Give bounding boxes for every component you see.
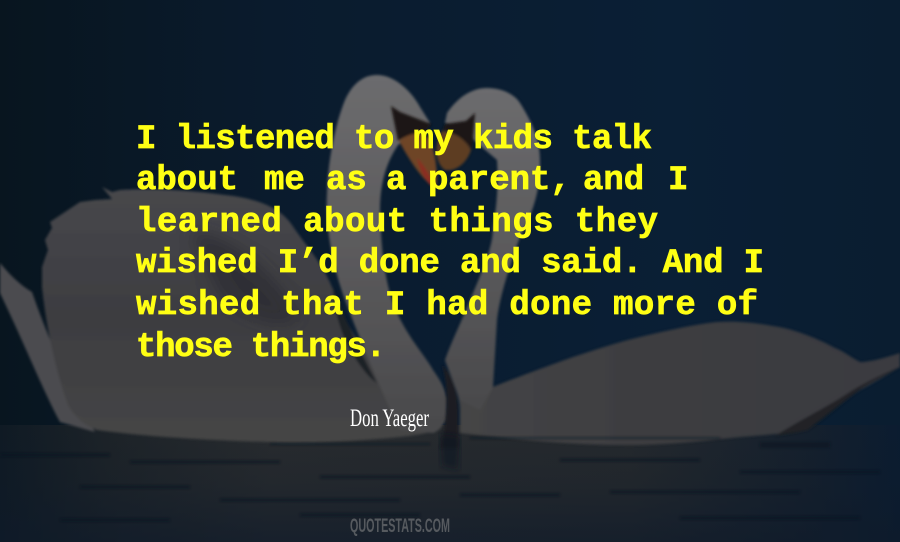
right swan xyxy=(440,88,900,448)
line 2: me xyxy=(264,162,305,200)
line 2: and xyxy=(583,162,644,200)
left swan xyxy=(0,75,447,443)
shadow between swans xyxy=(440,365,458,448)
line 2: I xyxy=(668,162,688,200)
right swan orange beak xyxy=(436,131,471,170)
author name: Don Yaeger xyxy=(350,405,429,432)
line 1: I listened to my kids talk xyxy=(136,121,652,159)
left swan red beak tip xyxy=(417,158,436,188)
right swan body xyxy=(445,322,900,445)
right swan neck xyxy=(445,88,540,410)
line 2: about xyxy=(136,162,238,200)
neck reflection xyxy=(440,434,460,470)
left swan orange beak xyxy=(399,133,437,188)
swan faces xyxy=(391,106,475,188)
water depth shading xyxy=(0,425,900,542)
line 4: wished I’d done and said. And I xyxy=(136,245,764,283)
water surface xyxy=(0,425,900,542)
water xyxy=(0,425,900,542)
line 2: a xyxy=(386,162,406,200)
quote text xyxy=(136,121,764,367)
left swan wing and body xyxy=(42,187,447,443)
left swan neck xyxy=(327,75,447,433)
line 2: as xyxy=(326,162,367,200)
left swan black mask xyxy=(391,106,431,141)
line 5: wished that I had done more of xyxy=(136,287,758,325)
left swan tail xyxy=(0,263,95,432)
left swan wing shadow xyxy=(190,230,300,323)
right swan black mask xyxy=(443,113,475,150)
left swan dark wing crease xyxy=(333,287,377,383)
watermark: QUOTESTATS.COM xyxy=(350,516,450,537)
right swan tail shadow xyxy=(775,367,900,436)
line 3: learned about things they xyxy=(136,204,658,242)
ripples xyxy=(0,438,880,520)
line 2: parent, xyxy=(428,162,571,200)
line 6: those things. xyxy=(136,329,386,367)
